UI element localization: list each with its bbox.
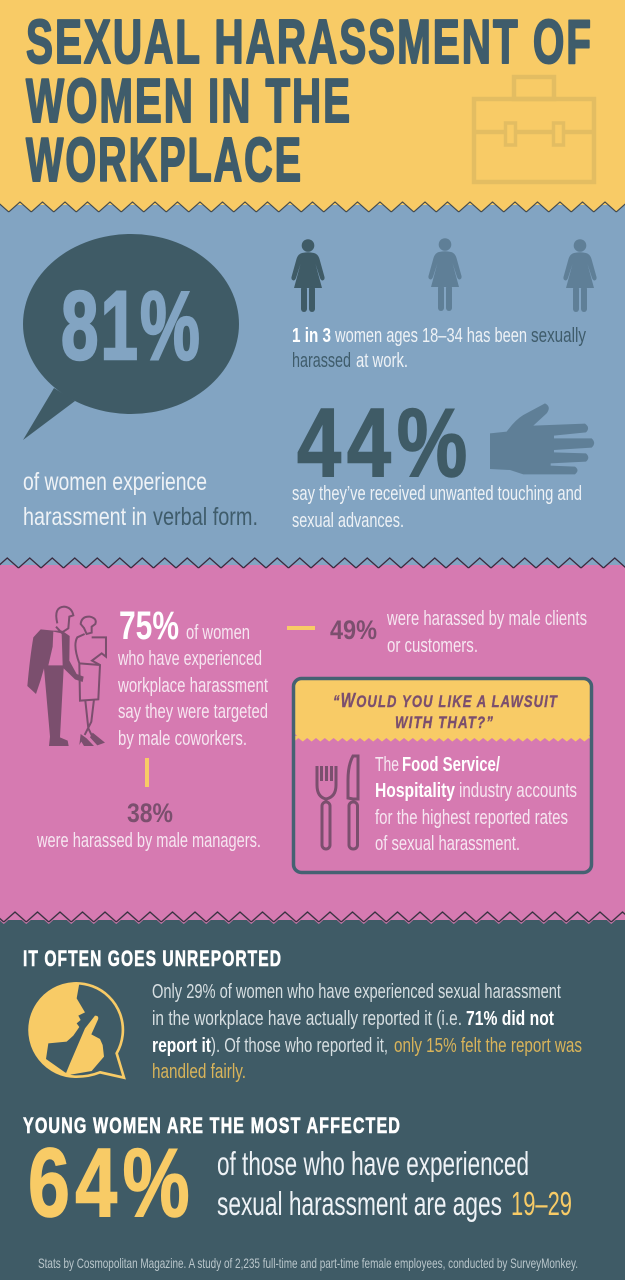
stat: 38%: 38% — [127, 798, 173, 828]
text: male clients: or customers. — [387, 635, 478, 657]
panel: who harasses — [0, 556, 625, 920]
icon: speech bubble with 81%: 81% — [61, 271, 202, 380]
callout: food service box — [294, 678, 592, 872]
panel: unreported and young women — [0, 910, 625, 1280]
text: ages 19-29: sexual harassment are ages — [217, 1185, 502, 1222]
text: verbal form: of women experience — [23, 468, 207, 496]
text: male managers: were harassed by male managers. — [36, 830, 261, 852]
text: 1 in 3 women: at work. — [356, 350, 408, 372]
panel: verbal harassment and statistics — [0, 200, 625, 565]
stat: 75% of women — [117, 604, 268, 750]
callout body text: of sexual harassment. — [375, 833, 520, 855]
callout body text: for the highest reported rates — [375, 807, 568, 829]
stat: 49%: 49% — [330, 615, 377, 645]
panel: title header — [0, 0, 625, 205]
callout body text: The — [375, 754, 399, 776]
callout heading: “WOULD YOU LIKE A LAWSUIT — [333, 690, 558, 712]
stat: 75% of women: workplace harassment — [117, 675, 268, 697]
title — [26, 8, 593, 195]
stat: 75% of women: 75% — [119, 604, 179, 648]
text: 1 in 3 women: harassed — [292, 350, 351, 372]
callout body text — [375, 754, 577, 855]
title: WORKPLACE — [26, 126, 303, 195]
callout body text: Hospitality — [375, 780, 456, 802]
stat: 44%: 44% — [297, 388, 473, 497]
text: only 29% reported: handled fairly. — [152, 1061, 246, 1083]
stat: 64%: 64% — [28, 1128, 195, 1237]
text: unwanted touching: sexual advances. — [292, 510, 404, 532]
text: ages 19-29: 19–29 — [511, 1185, 572, 1222]
icon: hand — [490, 403, 594, 474]
connector: vertical yellow bar — [145, 758, 149, 787]
text: only 29% reported: ). Of those who reported it, — [211, 1035, 388, 1057]
text: 1 in 3 women: 1 in 3 — [292, 325, 331, 347]
text: 1 in 3 women — [292, 325, 586, 372]
stat: 75% of women: by male coworkers. — [118, 728, 247, 750]
icon: speech bubble with 81% — [23, 234, 239, 440]
text: only 29% reported: report it — [152, 1035, 211, 1057]
stat: 75% of women: who have experienced — [117, 648, 262, 670]
text: only 29% reported: 71% did not — [466, 1008, 554, 1030]
title: WOMEN IN THE — [26, 67, 352, 136]
text: only 29% reported — [152, 981, 582, 1083]
text: male clients — [386, 608, 587, 657]
text: verbal form — [23, 468, 258, 531]
text: 1 in 3 women: women ages 18–34 has been — [334, 325, 527, 347]
callout body text: Food Service/ — [402, 754, 500, 776]
icon: shushing face bubble — [30, 983, 124, 1078]
text: verbal form: verbal form. — [153, 503, 258, 531]
callout body text: industry accounts — [459, 780, 577, 802]
connector: horizontal yellow bar — [287, 626, 315, 630]
text: ages 19-29 — [217, 1145, 572, 1222]
stat: 75% of women: say they were targeted — [118, 701, 268, 723]
heading: young women: YOUNG WOMEN ARE THE MOST AFFECTED — [23, 1113, 401, 1138]
text: unwanted touching — [292, 483, 582, 532]
icon: briefcase — [474, 77, 594, 182]
text: 1 in 3 women: sexually — [531, 325, 586, 347]
callout heading — [333, 690, 558, 732]
stat: 75% of women: of women — [186, 622, 250, 644]
icon: fork and knife — [317, 756, 358, 849]
text: only 29% reported: in the workplace have actually reported it (i.e. — [152, 1008, 462, 1030]
icon: man and woman coworkers — [27, 607, 106, 746]
heading: it often goes unreported: IT OFTEN GOES UNREPORTED — [23, 946, 282, 971]
icon: three women — [291, 238, 597, 312]
text: verbal form: harassment in — [23, 503, 147, 531]
callout heading: WITH THAT?” — [395, 713, 494, 732]
